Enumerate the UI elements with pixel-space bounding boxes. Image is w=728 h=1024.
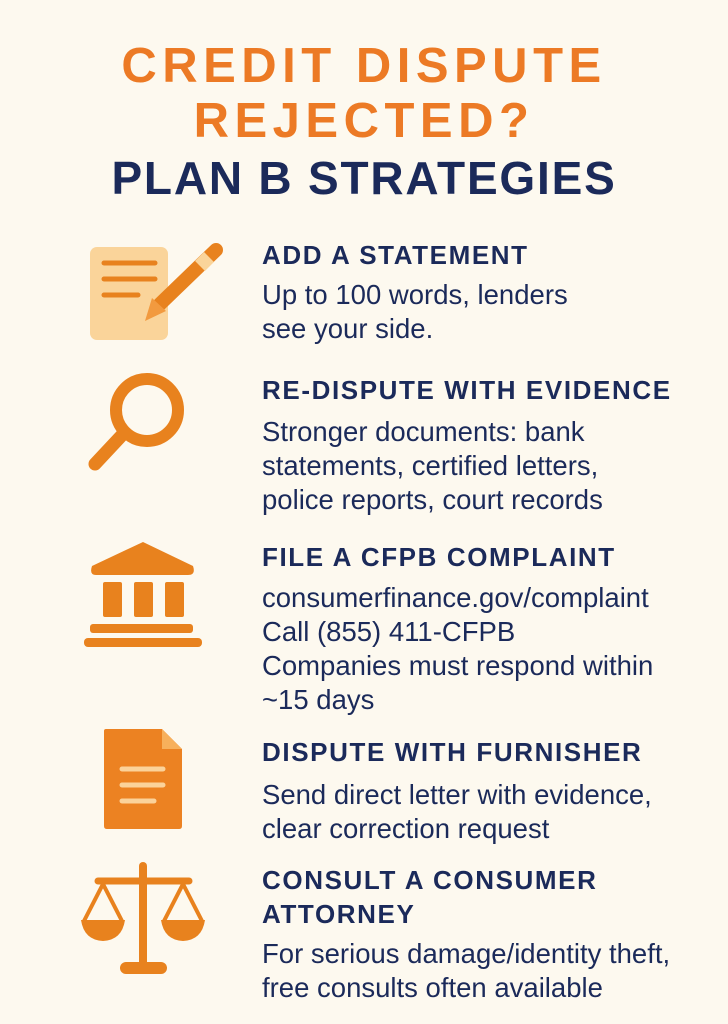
text [262, 416, 603, 515]
text [262, 582, 653, 715]
text: Call (855) 411-CFPB [262, 616, 515, 647]
text: ~15 days [262, 684, 374, 715]
section: furnisher [262, 737, 652, 844]
text: Up to 100 words, lenders [262, 279, 568, 310]
text [262, 279, 568, 344]
title [111, 39, 617, 204]
icon: bank [84, 542, 202, 647]
section: cfpb [262, 542, 653, 715]
text: Send direct letter with evidence, [262, 779, 652, 810]
text: statements, certified letters, [262, 450, 598, 481]
icon: document [104, 729, 182, 829]
section: attorney [262, 865, 670, 1003]
section: add a statement [262, 240, 568, 344]
text: see your side. [262, 313, 433, 344]
icon: scales [81, 866, 205, 974]
text: CREDIT DISPUTE [121, 39, 607, 93]
heading: FILE A CFPB COMPLAINT [262, 542, 616, 572]
text: police reports, court records [262, 484, 603, 515]
heading: RE-DISPUTE WITH EVIDENCE [262, 375, 672, 405]
icon: magnifier [95, 379, 178, 464]
heading [262, 865, 598, 929]
heading: DISPUTE WITH FURNISHER [262, 737, 642, 767]
text: REJECTED? [194, 94, 534, 148]
icon: note and pencil [90, 247, 216, 340]
text: Companies must respond within [262, 650, 653, 681]
text: consumerfinance.gov/complaint [262, 582, 649, 613]
text: For serious damage/identity theft, [262, 938, 670, 969]
text: free consults often available [262, 972, 603, 1003]
heading: CONSULT A CONSUMER [262, 865, 598, 895]
text: clear correction request [262, 813, 549, 844]
text: PLAN B STRATEGIES [111, 152, 617, 204]
section: re-dispute [262, 375, 672, 515]
text [262, 779, 652, 844]
text: Stronger documents: bank [262, 416, 585, 447]
heading: ADD A STATEMENT [262, 240, 529, 270]
text [262, 938, 670, 1003]
heading: ATTORNEY [262, 899, 415, 929]
